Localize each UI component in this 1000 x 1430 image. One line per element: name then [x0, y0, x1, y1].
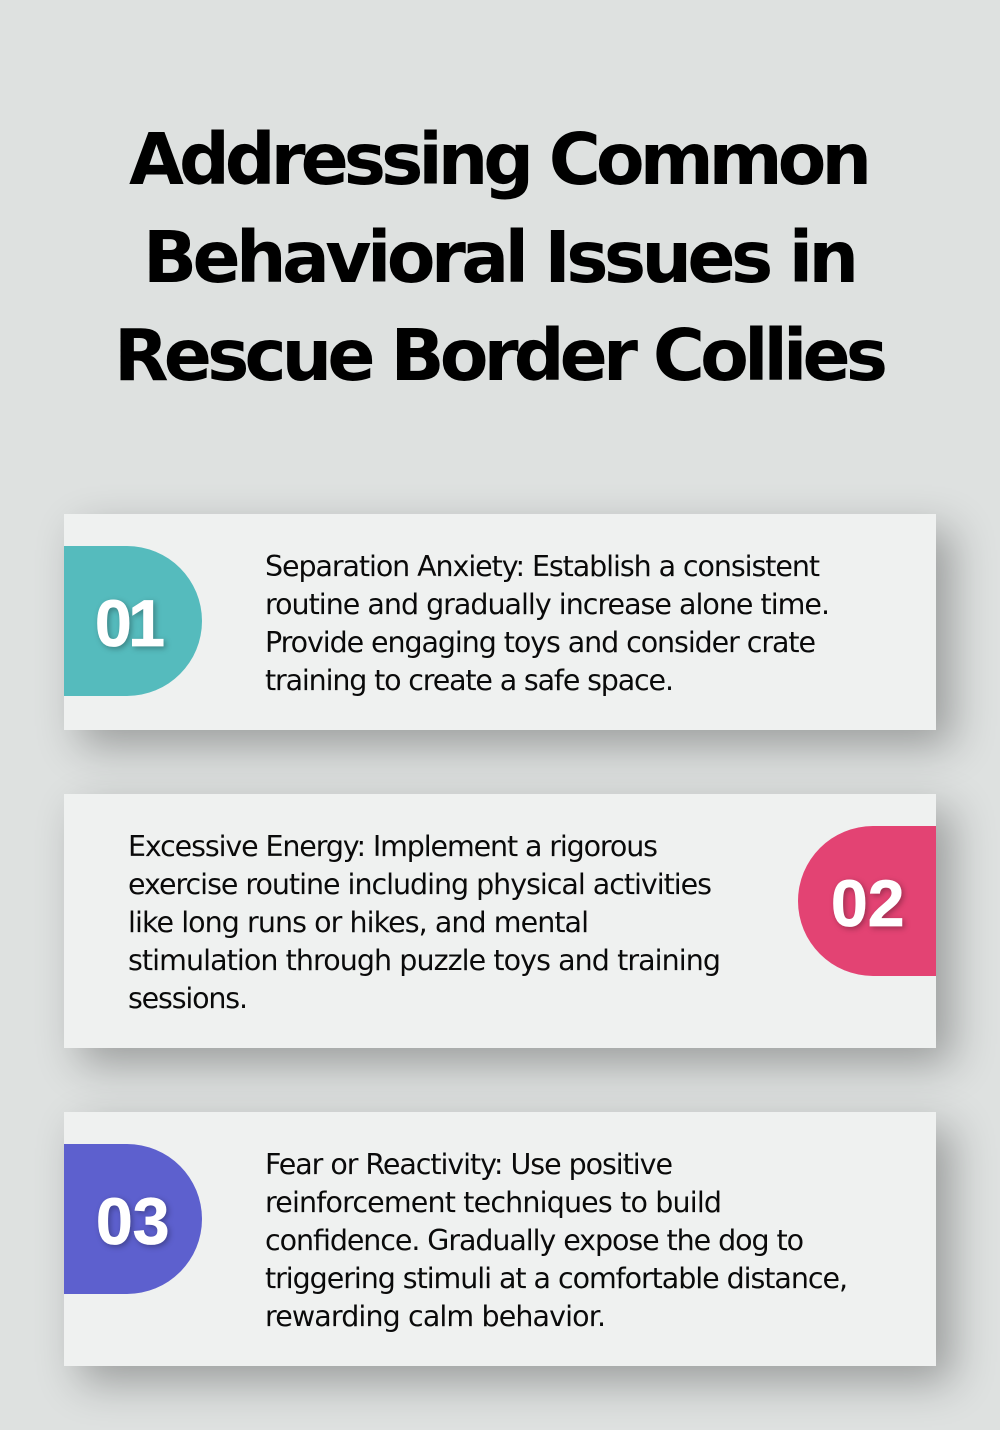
- number: 02: 02: [831, 866, 904, 940]
- title: [114, 118, 888, 397]
- text: fear or reactivity: triggering stimuli at a comfortable distance,: [265, 1262, 848, 1295]
- panel: step 1 card: [64, 514, 936, 730]
- panel: step 2 card: [64, 794, 936, 1048]
- text: excessive energy: Excessive Energy: Implement a rigorous: [128, 830, 658, 863]
- title: Addressing Common: [129, 118, 872, 201]
- badge: step 2 pink tab: [798, 826, 936, 976]
- number: 01: 01: [95, 586, 165, 660]
- text: excessive energy: like long runs or hikes, and mental: [128, 906, 589, 939]
- text: excessive energy: [128, 830, 721, 1015]
- badge: step 3 blue tab: [64, 1144, 202, 1294]
- text: fear or reactivity: Fear or Reactivity: Use positive: [265, 1148, 673, 1181]
- panel: step 3 card: [64, 1112, 936, 1366]
- text: separation anxiety: [265, 550, 830, 697]
- badge: step 1 teal tab: [64, 546, 202, 696]
- text: excessive energy: stimulation through puzzle toys and training: [128, 944, 721, 977]
- text: fear or reactivity: [265, 1148, 848, 1333]
- text: excessive energy: exercise routine including physical activities: [128, 868, 712, 901]
- title: Behavioral Issues in: [143, 216, 859, 299]
- text: separation anxiety: Separation Anxiety: Establish a consistent: [265, 550, 820, 583]
- text: excessive energy: sessions.: [128, 982, 248, 1015]
- title: Rescue Border Collies: [114, 314, 888, 397]
- text: fear or reactivity: rewarding calm behavior.: [265, 1300, 606, 1333]
- text: separation anxiety: Provide engaging toys and consider crate: [265, 626, 816, 659]
- text: fear or reactivity: reinforcement techniques to build: [265, 1186, 722, 1219]
- number: 03: 03: [96, 1184, 169, 1258]
- text: separation anxiety: routine and gradually increase alone time.: [265, 588, 830, 621]
- text: fear or reactivity: confidence. Gradually expose the dog to: [265, 1224, 804, 1257]
- text: separation anxiety: training to create a safe space.: [265, 664, 674, 697]
